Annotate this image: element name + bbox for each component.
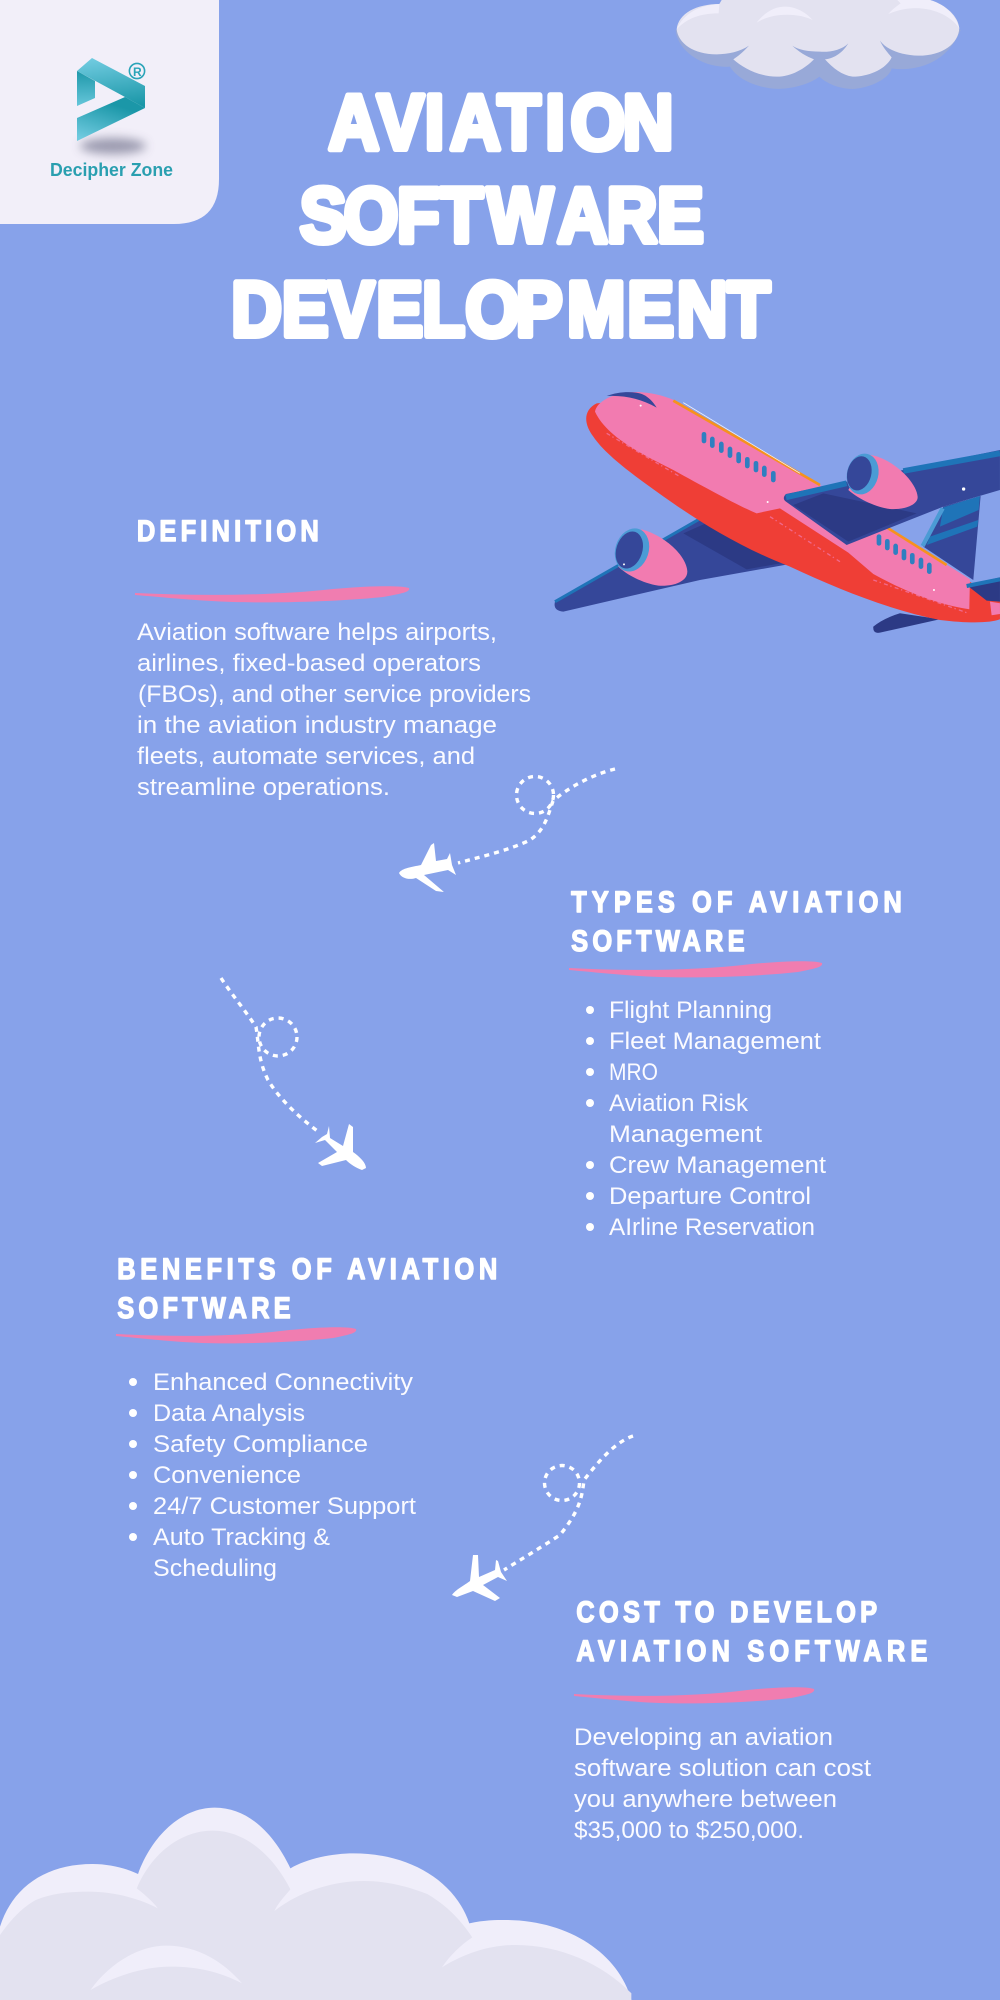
heading: types (571, 885, 902, 957)
right stabilizer (967, 577, 1000, 602)
near engine (848, 455, 918, 509)
bullet list: types: Management (609, 1121, 762, 1148)
icon: small plane with dotted trail 1 (399, 769, 615, 892)
heading: benefits: SOFTWARE (117, 1291, 291, 1324)
icon: large airplane (555, 392, 1000, 633)
logo wordmark: Decipher Zone (50, 160, 173, 180)
definition text: streamline operations. (137, 774, 390, 801)
tail fin (923, 496, 981, 580)
title: SOFTWARE (300, 172, 704, 259)
bullet list: benefits: Convenience (153, 1462, 301, 1489)
icon: bottom cloud (0, 1808, 631, 2000)
lower stabilizer (873, 613, 940, 633)
bullet list: benefits: Auto Tracking & (153, 1524, 330, 1551)
bullet list: types: Fleet Management (609, 1028, 821, 1055)
cost text (574, 1724, 871, 1844)
panel: types of aviation software (569, 885, 902, 1241)
far engine (618, 529, 687, 586)
fuselage underside (586, 400, 1000, 622)
definition text: fleets, automate services, and (137, 743, 475, 770)
cockpit window (607, 392, 657, 408)
definition text: airlines, fixed-based operators (137, 650, 481, 677)
far wing (555, 515, 790, 612)
bullet list: benefits (129, 1369, 416, 1582)
icon: Decipher Zone logo mark (77, 58, 146, 154)
bullet list: types: Crew Management (609, 1152, 826, 1179)
bullet list: benefits: Data Analysis (153, 1400, 305, 1427)
brush underline (569, 961, 822, 977)
definition text: Aviation software helps airports, (137, 619, 497, 646)
bullet list: types: AIrline Reservation (609, 1214, 815, 1241)
heading: cost: COST TO DEVELOP (576, 1595, 877, 1628)
panel: logo card (0, 0, 219, 224)
brush underline (135, 586, 409, 602)
definition text: in the aviation industry manage (137, 712, 497, 739)
title: DEVELOPMENT (231, 266, 770, 353)
cost text: $35,000 to $250,000. (574, 1817, 804, 1844)
bullet list: benefits: Safety Compliance (153, 1431, 368, 1458)
definition text (137, 619, 531, 801)
title: AVIATION (329, 79, 673, 166)
tail cone (990, 602, 1000, 615)
heading: cost (576, 1595, 927, 1667)
cost text: software solution can cost (574, 1755, 871, 1782)
panel: definition (135, 514, 531, 801)
bullet list: types: Flight Planning (609, 997, 772, 1024)
bullet list: benefits: Enhanced Connectivity (153, 1369, 413, 1396)
top stripe (673, 401, 947, 565)
brush underline (116, 1327, 356, 1343)
bullet list: types: Departure Control (609, 1183, 811, 1210)
cost text: you anywhere between (574, 1786, 837, 1813)
heading: benefits (117, 1252, 497, 1324)
heading: types: TYPES OF AVIATION (571, 885, 902, 918)
cabin windows (702, 432, 932, 574)
title (231, 79, 770, 353)
icon: small plane with dotted trail 2 (221, 978, 366, 1170)
near wing (784, 450, 1000, 545)
cost text: Developing an aviation (574, 1724, 833, 1751)
panel: benefits of aviation software (116, 1252, 497, 1582)
bullet list: benefits: Scheduling (153, 1555, 277, 1582)
panel: cost to develop aviation software (574, 1595, 927, 1844)
icon: small plane with dotted trail 3 (452, 1436, 633, 1601)
bullet list: types: Aviation Risk (609, 1090, 749, 1117)
icon: top cloud (676, 0, 961, 89)
brush underline (574, 1687, 814, 1703)
fuselage top (595, 392, 970, 609)
bullet list: benefits: 24/7 Customer Support (153, 1493, 416, 1520)
bullet list: types (586, 997, 826, 1241)
bullet list: types: MRO (609, 1059, 658, 1086)
heading: cost: AVIATION SOFTWARE (576, 1634, 927, 1667)
heading: benefits: BENEFITS OF AVIATION (117, 1252, 497, 1285)
icon: Decipher Zone logo mark: R (133, 65, 142, 79)
heading: definition: DEFINITION (137, 514, 319, 547)
heading: types: SOFTWARE (571, 924, 745, 957)
definition text: (FBOs), and other service providers (138, 681, 531, 708)
